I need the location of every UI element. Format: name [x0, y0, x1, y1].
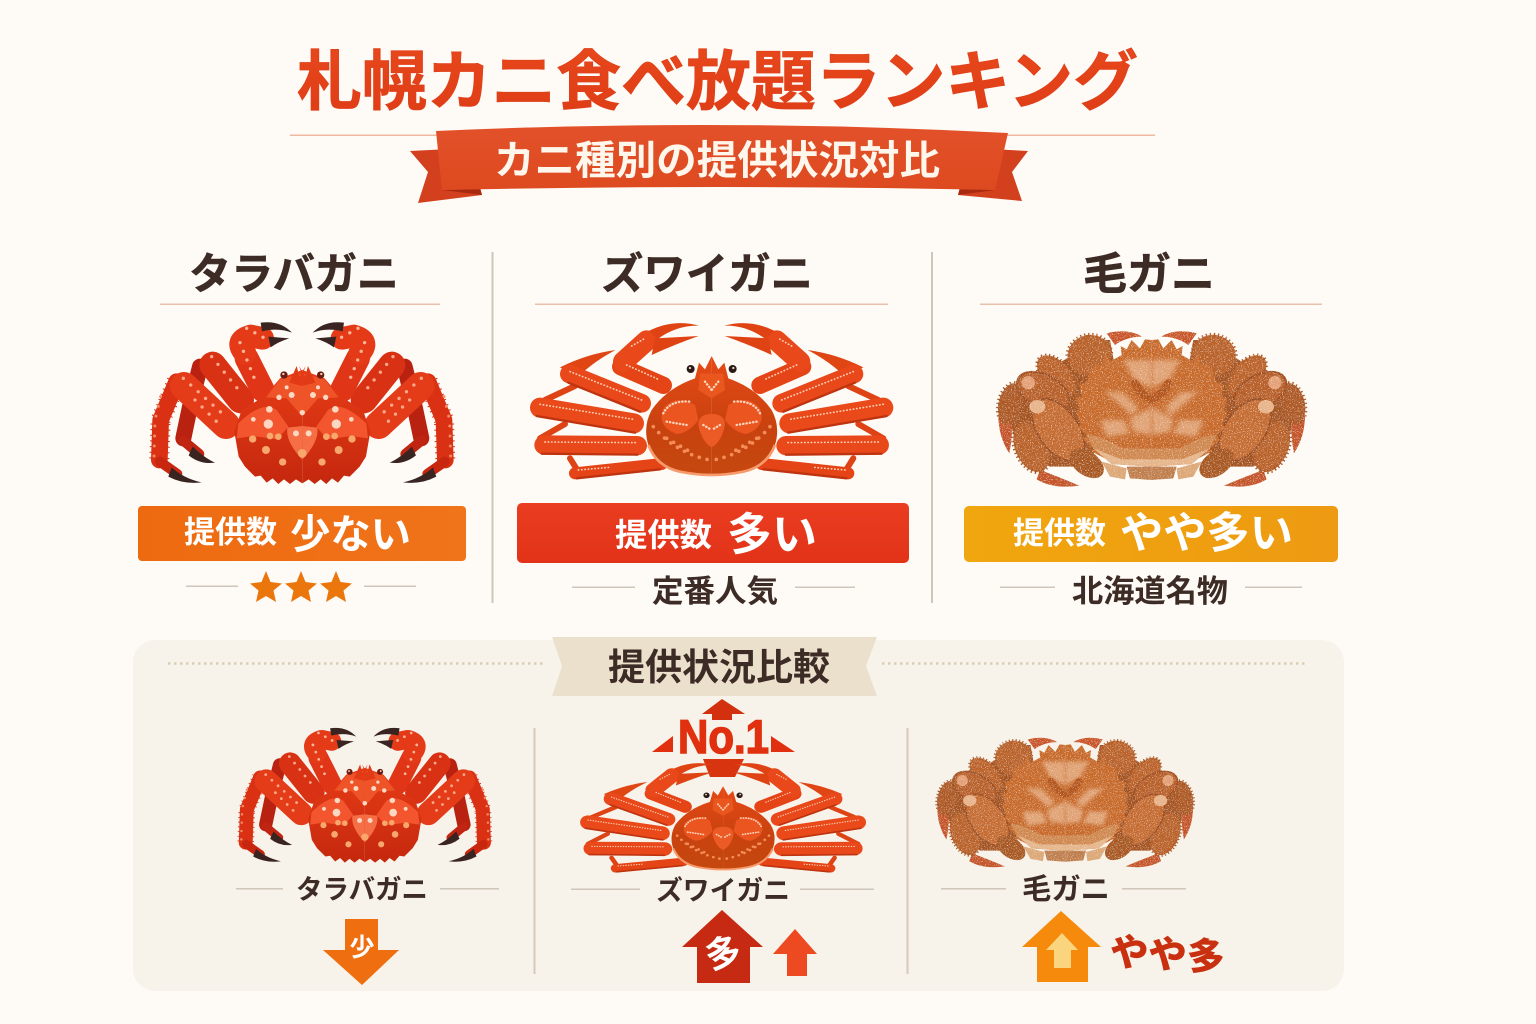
column divider lines	[492, 252, 933, 603]
icon: snow crab	[537, 323, 887, 478]
badge: 提供数 少ない	[138, 506, 466, 561]
icon: king crab small	[241, 728, 488, 863]
badge: 提供数 やや多い	[964, 506, 1338, 562]
badge: 提供数 少ない: 少ない	[290, 513, 411, 557]
arrow: down 少: 少	[349, 934, 375, 962]
heading: 毛ガニ: 毛ガニ	[1083, 250, 1215, 299]
badge: 提供数 多い	[517, 503, 909, 563]
comparison: ズワイガニ	[571, 699, 874, 983]
arrow: small up	[773, 929, 817, 976]
icon: king crab	[154, 322, 451, 484]
subtitle ribbon: カニ種別の提供状況対比	[494, 139, 940, 183]
comparison heading tag: 提供状況比較	[608, 647, 830, 688]
label: タラバガニ: タラバガニ	[296, 875, 428, 905]
icon: horsehair crab small	[933, 736, 1197, 867]
badge: No.1: No.1	[678, 710, 769, 763]
panel: 毛ガニ	[964, 250, 1338, 609]
panel: comparison	[133, 637, 1344, 991]
comparison: 毛ガニ	[933, 736, 1226, 982]
caption: 北海道名物: 北海道名物	[1072, 574, 1228, 609]
badge: 提供数 多い: 多い	[727, 509, 817, 560]
comparison heading tag	[552, 637, 877, 696]
panel: ズワイガニ	[517, 251, 909, 609]
subtitle ribbon	[290, 125, 1155, 203]
arrow: up orange	[1022, 911, 1101, 982]
rating: three stars	[186, 571, 416, 602]
label: 毛ガニ: 毛ガニ	[1022, 873, 1110, 906]
heading: タラバガニ: タラバガニ	[189, 251, 399, 299]
heading: ズワイガニ: ズワイガニ	[601, 251, 813, 299]
arrow: down 少	[323, 919, 399, 985]
panel: タラバガニ	[138, 251, 466, 602]
title: 札幌カニ食べ放題ランキング	[297, 45, 1138, 118]
label: ズワイガニ: ズワイガニ	[656, 875, 790, 906]
badge: 提供数 やや多い: やや多い	[1120, 510, 1293, 558]
badge: No.1	[652, 699, 795, 777]
label: やや多: やや多	[1109, 932, 1226, 980]
icon: horsehair crab	[994, 329, 1310, 487]
badge: 提供数 多い: 提供数	[615, 517, 712, 553]
icon: snow crab small	[585, 763, 861, 872]
badge: 提供数 少ない: 提供数	[184, 515, 277, 550]
comparison: タラバガニ	[236, 728, 499, 985]
caption: 定番人気: 定番人気	[652, 574, 778, 609]
arrow: up 多	[682, 910, 763, 983]
arrow: up 多: 多	[701, 930, 745, 977]
badge: 提供数 やや多い: 提供数	[1013, 516, 1106, 551]
